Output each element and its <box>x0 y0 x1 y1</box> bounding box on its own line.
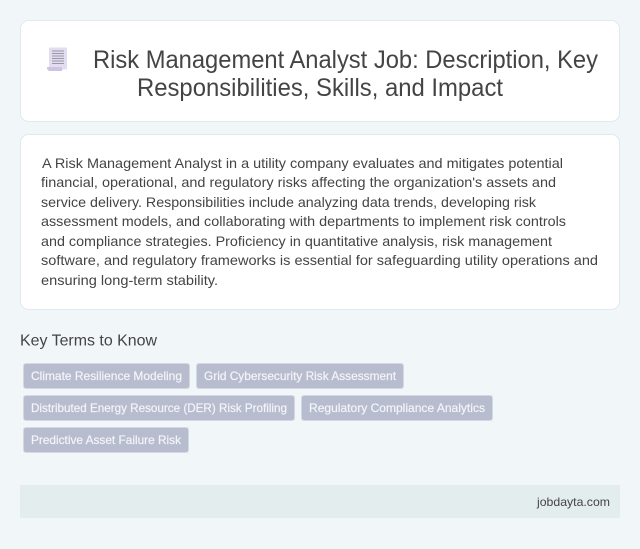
chip: predictive asset failure risk: Predictive Asset Failure Risk <box>31 433 182 447</box>
chip: grid cybersecurity risk assessment <box>196 364 404 388</box>
panel: header card <box>20 20 620 122</box>
chip: regulatory compliance analytics <box>302 396 492 420</box>
panel: key term chips <box>24 364 492 452</box>
chip: regulatory compliance analytics: Regulatory Compliance Analytics <box>309 401 485 415</box>
icon: document scroll <box>47 48 67 71</box>
title <box>93 46 598 102</box>
text block: job description: service delivery. Responsibilities include analyzing data trends, developing risk <box>41 194 537 210</box>
title: Risk Management Analyst Job: Description, Key <box>93 46 598 74</box>
footer bar: jobdayta.com <box>536 495 610 509</box>
chip: predictive asset failure risk <box>24 428 188 452</box>
text block: job description: A Risk Management Analyst in a utility company evaluates and mitigates potential <box>42 155 563 171</box>
chip: climate resilience modeling <box>24 364 190 388</box>
panel: description card <box>20 134 620 310</box>
chip: distributed energy resource risk profiling <box>24 396 294 420</box>
text block: job description: and compliance strategies. Proficiency in quantitative analysis, risk management <box>41 233 552 249</box>
text block: job description: ensuring long-term stability. <box>41 272 218 288</box>
footer bar <box>20 485 620 518</box>
chip: climate resilience modeling: Climate Resilience Modeling <box>31 369 182 383</box>
heading: key terms: Key Terms to Know <box>20 332 157 350</box>
title: Responsibilities, Skills, and Impact <box>137 74 503 102</box>
text block: job description: assessment models, and collaborating with departments to implement risk controls <box>41 213 566 229</box>
text block: job description <box>41 155 598 288</box>
chip: grid cybersecurity risk assessment: Grid Cybersecurity Risk Assessment <box>204 369 397 383</box>
text block: job description: financial, operational, and regulatory risks affecting the organization's assets and <box>41 174 556 190</box>
chip: distributed energy resource risk profiling: Distributed Energy Resource (DER) Risk Profiling <box>31 401 287 415</box>
text block: job description: software, and regulatory frameworks is essential for safeguarding utility operations and <box>41 252 598 268</box>
